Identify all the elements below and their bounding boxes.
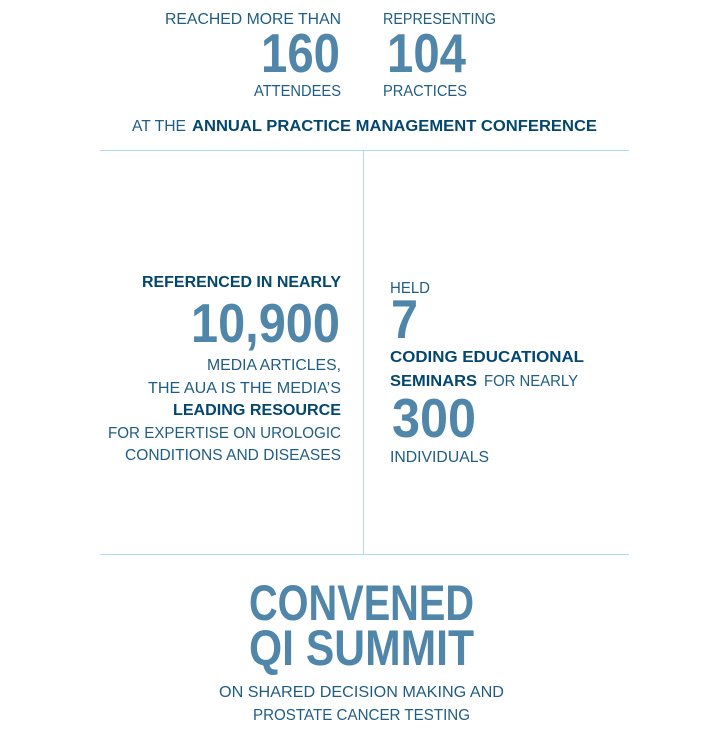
text block: summit topic: ON SHARED DECISION MAKING AND: [219, 684, 504, 701]
text block: summit topic: [219, 684, 504, 724]
panel: coding seminars: HELD: [390, 280, 430, 297]
stat: 104 practices: [383, 11, 496, 100]
stat: 104 practices: REPRESENTING: [383, 11, 496, 28]
heading: convened QI summit: [249, 575, 474, 676]
panel: media articles: FOR EXPERTISE ON UROLOGIC: [108, 425, 341, 442]
stat: 104 practices: PRACTICES: [383, 83, 467, 100]
conference caption: ANNUAL PRACTICE MANAGEMENT CONFERENCE: [192, 118, 597, 135]
panel: media articles: LEADING RESOURCE: [173, 402, 341, 419]
panel: coding seminars: CODING EDUCATIONAL: [390, 349, 584, 366]
panel: coding seminars: 300: [392, 387, 476, 449]
panel: media articles: REFERENCED IN NEARLY: [142, 274, 341, 291]
panel: media articles: MEDIA ARTICLES,: [207, 357, 341, 374]
panel: coding seminars: FOR NEARLY: [484, 373, 578, 390]
heading: convened QI summit: QI SUMMIT: [249, 620, 474, 676]
panel: coding seminars: INDIVIDUALS: [390, 449, 489, 466]
panel: media articles: THE AUA IS THE MEDIA’S: [148, 380, 341, 397]
panel: media articles: [108, 274, 341, 464]
panel: coding seminars: SEMINARS: [390, 373, 477, 390]
conference caption: AT THE: [132, 118, 186, 135]
text block: summit topic: PROSTATE CANCER TESTING: [253, 707, 470, 724]
stat: 160 attendees: 160: [261, 22, 340, 84]
panel: media articles: 10,900: [191, 292, 340, 354]
panel: coding seminars: 7: [391, 288, 418, 350]
stat: 104 practices: 104: [387, 22, 466, 84]
stat: 160 attendees: REACHED MORE THAN: [165, 11, 341, 28]
panel: media articles: CONDITIONS AND DISEASES: [125, 447, 341, 464]
panel: coding seminars: [390, 280, 584, 466]
stat: 160 attendees: ATTENDEES: [254, 83, 341, 100]
heading: convened QI summit: CONVENED: [249, 575, 474, 631]
stat: 160 attendees: [165, 11, 341, 100]
